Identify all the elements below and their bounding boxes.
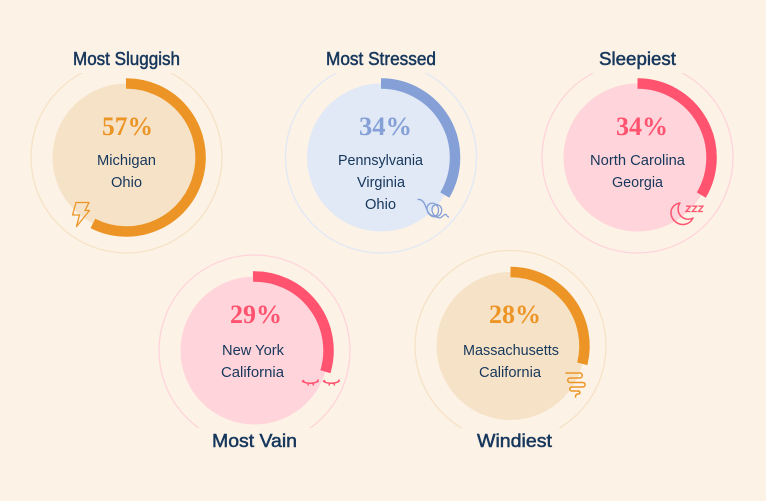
heading: windiest: Windiest <box>477 431 552 451</box>
panel: most vain <box>159 255 350 458</box>
panel: windiest <box>415 250 606 458</box>
icon: moon with zzz <box>671 203 703 225</box>
states: pennsylvania, virginia, ohio: Pennsylvania <box>338 152 424 169</box>
states: north carolina, georgia: North Carolina <box>590 152 686 169</box>
panel: sleepiest <box>542 40 733 253</box>
states: massachusetts, california <box>463 342 559 381</box>
states: north carolina, georgia <box>590 152 686 191</box>
states: new york, california: California <box>221 364 285 381</box>
panel: most sluggish <box>31 40 222 253</box>
heading: sleepiest: Sleepiest <box>599 49 676 69</box>
percentage: 28%: 28% <box>489 299 541 329</box>
states: michigan, ohio <box>97 152 156 191</box>
states: new york, california <box>221 342 285 381</box>
icon: eyelashes <box>302 380 340 386</box>
icon: lightning bolt <box>72 202 90 226</box>
states: massachusetts, california: California <box>479 364 542 381</box>
states: massachusetts, california: Massachusetts <box>463 342 559 359</box>
heading: most vain: Most Vain <box>212 431 297 451</box>
percentage: 34%: 34% <box>616 111 668 141</box>
icon: wind squiggle <box>566 373 585 397</box>
states: michigan, ohio: Michigan <box>97 152 156 169</box>
states: pennsylvania, virginia, ohio: Ohio <box>365 196 396 213</box>
states: new york, california: New York <box>222 342 284 359</box>
states: north carolina, georgia: Georgia <box>612 174 664 191</box>
states: pennsylvania, virginia, ohio <box>338 152 424 213</box>
icon: tangled scribble <box>418 199 448 218</box>
states: michigan, ohio: Ohio <box>111 174 142 191</box>
percentage: 57%: 57% <box>102 111 153 141</box>
percentage: 34%: 34% <box>359 111 412 141</box>
heading: most stressed: Most Stressed <box>326 49 436 69</box>
states: pennsylvania, virginia, ohio: Virginia <box>357 174 406 191</box>
panel: most stressed <box>286 40 476 253</box>
percentage: 29%: 29% <box>230 299 282 329</box>
heading: most sluggish: Most Sluggish <box>73 49 180 69</box>
